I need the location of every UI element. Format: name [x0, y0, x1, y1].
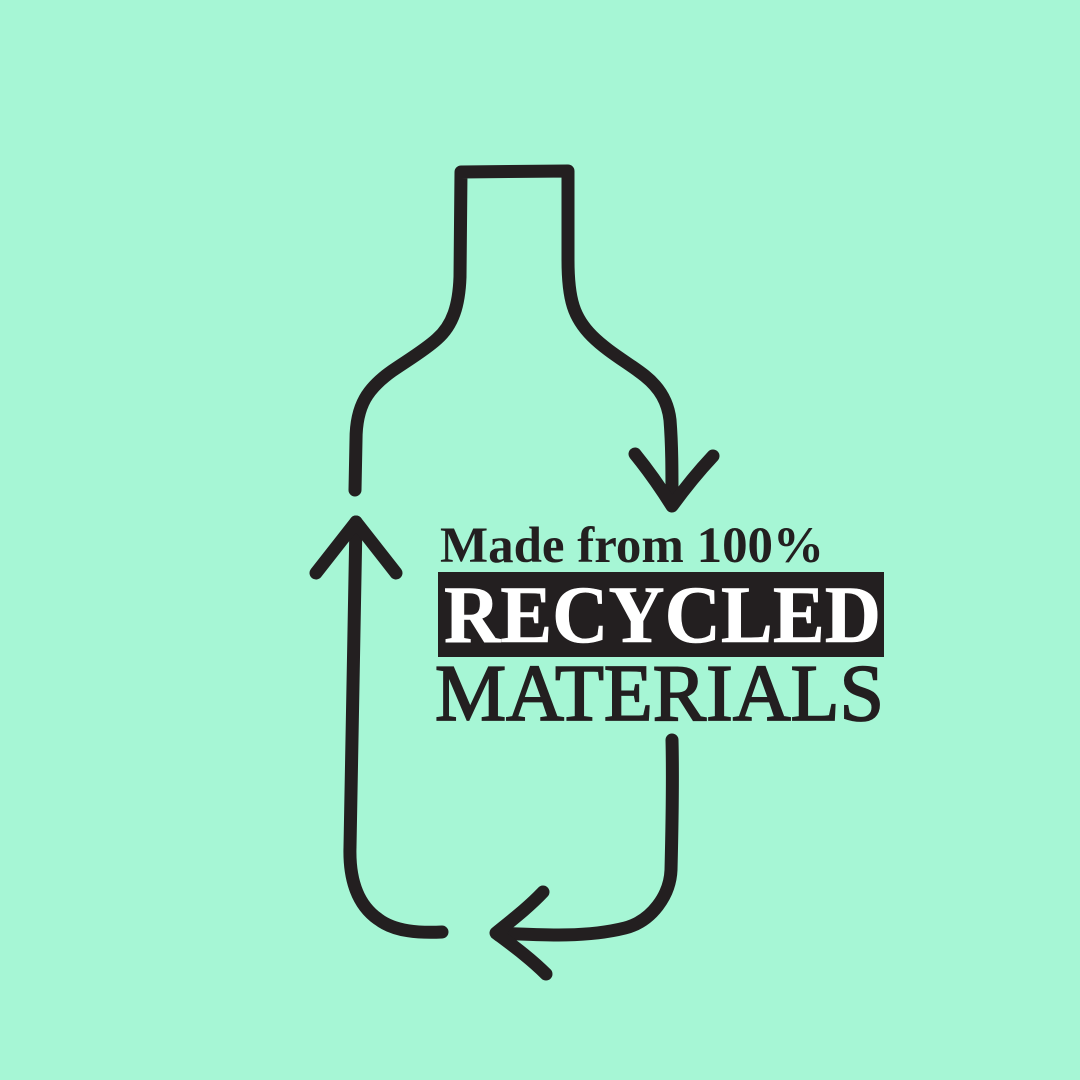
arrowhead: pointing down — [635, 454, 713, 506]
label: recycled on black banner — [438, 569, 884, 660]
arrowhead: pointing left — [496, 892, 546, 974]
arrow: left side going up — [350, 522, 442, 932]
arrow: lower right going to the bottom — [497, 740, 672, 935]
icon: bottle outline made of recycling arrows — [316, 171, 713, 974]
text: made from 100%: Made from 100% — [440, 518, 824, 574]
banner — [438, 572, 884, 657]
text: materials: MATERIALS — [435, 648, 884, 738]
arrowhead: pointing up — [316, 522, 396, 573]
arrow: bottle top flowing down the right shoulder — [355, 171, 672, 503]
text: recycled: RECYCLED — [444, 569, 881, 660]
